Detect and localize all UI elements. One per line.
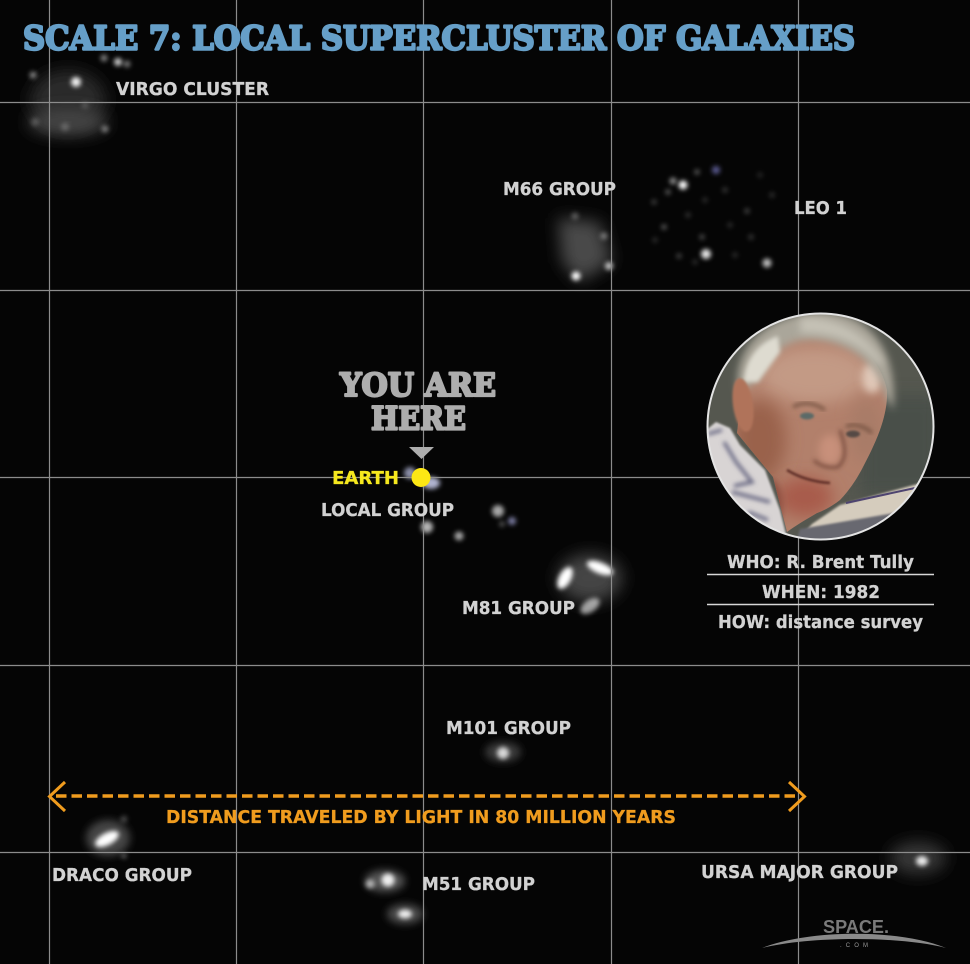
you are here callout: YOU ARE <box>339 366 496 404</box>
galaxy: Ursa Major group <box>890 842 946 874</box>
label: Earth: EARTH <box>332 468 399 489</box>
logo: Space.com: SPACE. <box>823 917 889 937</box>
label: Local group: LOCAL GROUP <box>321 500 454 521</box>
book <box>807 482 918 529</box>
panel: who when how: WHO: R. Brent Tully <box>727 552 914 573</box>
mouth <box>787 470 830 483</box>
label: Leo 1: LEO 1 <box>794 198 847 219</box>
galaxy: Local group <box>404 467 516 540</box>
arrow: 80 million light years span <box>50 782 804 811</box>
chalkboard <box>708 314 932 536</box>
shirt <box>708 421 788 534</box>
you are here callout: HERE <box>371 400 466 438</box>
label: M81 group: M81 GROUP <box>462 598 575 619</box>
you are here callout <box>339 366 496 438</box>
label: M101 group: M101 GROUP <box>446 718 571 739</box>
title: SCALE 7: LOCAL SUPERCLUSTER OF GALAXIES <box>23 18 855 58</box>
galaxy: M51 group <box>365 870 423 924</box>
marker: Earth dot <box>412 468 430 487</box>
eyes <box>793 403 825 410</box>
label: M66 group: M66 GROUP <box>503 179 616 200</box>
label: M51 group: M51 GROUP <box>422 874 535 895</box>
galaxy: Virgo cluster <box>28 54 130 135</box>
face <box>737 336 887 532</box>
label: distance traveled by light: DISTANCE TRAVELED BY LIGHT IN 80 MILLION YEARS <box>166 807 676 828</box>
galaxy: M81 group <box>554 554 622 617</box>
hair <box>737 312 894 410</box>
label: Virgo cluster: VIRGO CLUSTER <box>116 79 269 100</box>
icon: pointer triangle <box>409 447 434 459</box>
label: Draco group: DRACO GROUP <box>52 865 192 886</box>
logo: Space.com: .COM <box>840 943 868 949</box>
nose <box>819 435 841 465</box>
panel: who when how: HOW: distance survey <box>718 612 923 633</box>
panel: who when how <box>707 552 934 633</box>
label: Ursa Major group: URSA MAJOR GROUP <box>701 862 898 883</box>
portrait: R. Brent Tully <box>706 312 934 540</box>
galaxy: M66 group <box>558 212 613 282</box>
panel: who when how: WHEN: 1982 <box>762 582 880 603</box>
galaxy: Leo 1 <box>651 166 775 268</box>
logo: Space.com <box>762 917 946 949</box>
galaxy: M101 group <box>485 742 521 762</box>
ear <box>731 378 754 432</box>
galaxy: Draco group <box>86 816 130 859</box>
